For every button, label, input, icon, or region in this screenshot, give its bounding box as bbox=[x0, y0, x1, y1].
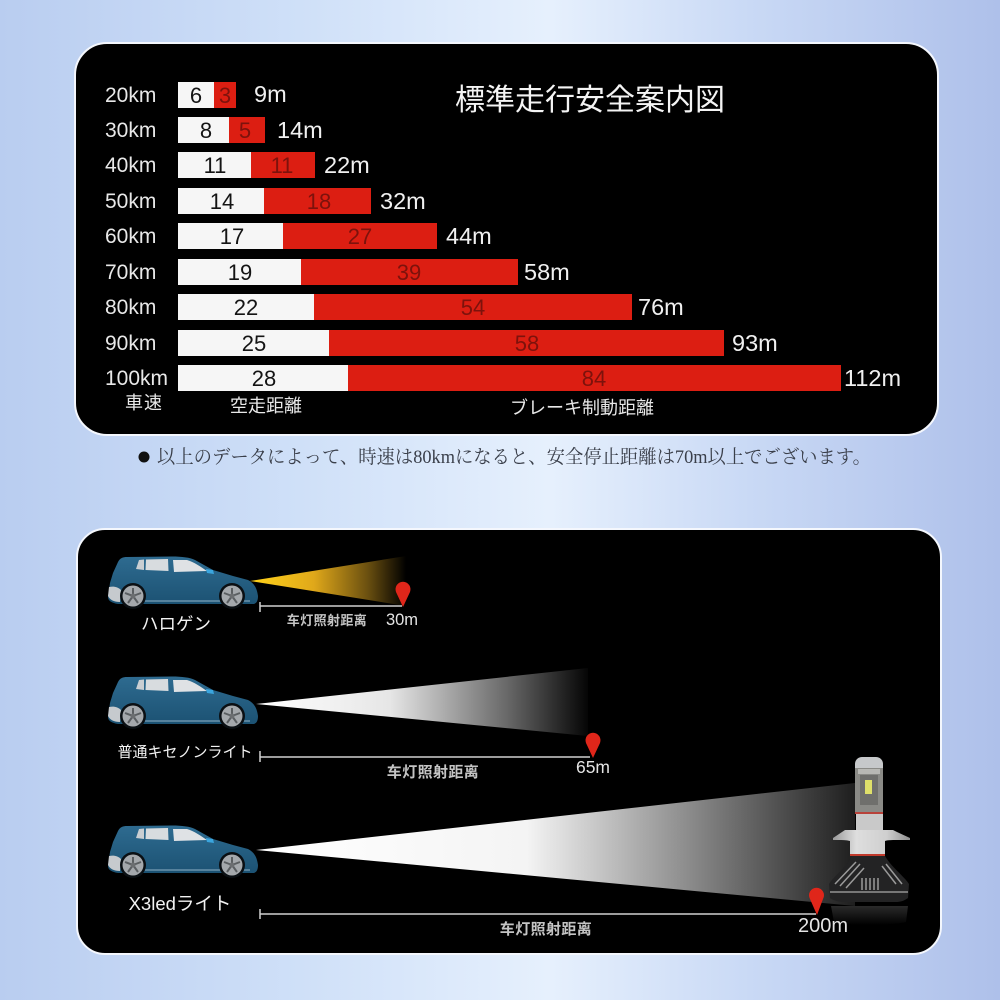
total distance values: 44m bbox=[446, 223, 492, 249]
reaction distance values: 11 bbox=[204, 153, 226, 178]
car: xenon bbox=[108, 676, 258, 729]
reaction distance values: 19 bbox=[228, 260, 252, 285]
speed labels: 90km bbox=[105, 332, 156, 355]
beam: xenon bbox=[256, 668, 588, 736]
speed labels: 40km bbox=[105, 154, 156, 177]
total distance values: 9m bbox=[254, 81, 287, 107]
braking distance values: 18 bbox=[307, 189, 331, 214]
halogen row bbox=[108, 556, 418, 634]
pin bbox=[809, 888, 824, 915]
led row bbox=[108, 757, 910, 938]
speed labels: 60km bbox=[105, 225, 156, 248]
total distance values: 58m bbox=[524, 259, 570, 285]
range caption: 车灯照射距离 bbox=[287, 613, 367, 628]
axis caption: braking distance: ブレーキ制動距離 bbox=[510, 397, 654, 418]
braking distance values: 11 bbox=[271, 153, 293, 178]
braking distance values: 5 bbox=[239, 118, 251, 143]
total distance values: 22m bbox=[324, 152, 370, 178]
speed labels: 80km bbox=[105, 296, 156, 319]
axis caption: reaction distance: 空走距離 bbox=[230, 396, 302, 416]
speed labels: 20km bbox=[105, 84, 156, 107]
braking distance values: 27 bbox=[348, 224, 372, 249]
xenon row bbox=[108, 668, 610, 781]
speed labels bbox=[105, 84, 168, 390]
range value: 200m bbox=[798, 915, 848, 937]
range caption: 车灯照射距离 bbox=[387, 763, 479, 781]
car: halogen bbox=[108, 556, 258, 609]
braking distance values: 54 bbox=[461, 295, 485, 320]
label: halogen: ハロゲン bbox=[141, 614, 211, 634]
braking distance values: 58 bbox=[515, 331, 539, 356]
total distance values: 32m bbox=[380, 188, 426, 214]
pin bbox=[396, 582, 410, 607]
reaction distance values: 22 bbox=[234, 295, 258, 320]
axis caption: vehicle speed: 車速 bbox=[125, 393, 163, 413]
range line bbox=[260, 751, 590, 762]
label: led: X3ledライト bbox=[129, 893, 231, 914]
total distance values: 76m bbox=[638, 294, 684, 320]
car: led bbox=[108, 826, 258, 878]
total distance values: 14m bbox=[277, 117, 323, 143]
icon: LED headlight bulb bbox=[829, 757, 910, 925]
beam: led bbox=[256, 783, 855, 906]
pin bbox=[586, 733, 600, 758]
reaction distance values: 14 bbox=[210, 189, 234, 214]
range value: 65m bbox=[576, 757, 610, 777]
range caption: 车灯照射距离 bbox=[500, 920, 592, 938]
reaction distance values: 6 bbox=[190, 83, 202, 108]
reaction distance values: 28 bbox=[252, 366, 276, 391]
label: xenon: 普通キセノンライト bbox=[117, 744, 253, 761]
total distance values: 112m bbox=[844, 365, 901, 391]
reaction distance values: 8 bbox=[200, 118, 212, 143]
chart title: 標準走行安全案内図 bbox=[455, 84, 725, 117]
reaction distance values: 25 bbox=[242, 331, 266, 356]
reaction distance values: 17 bbox=[220, 224, 244, 249]
range value: 30m bbox=[386, 611, 418, 629]
panel: headlight range comparison bbox=[77, 529, 941, 954]
speed labels: 30km bbox=[105, 119, 156, 142]
speed labels: 70km bbox=[105, 261, 156, 284]
braking distance values: 84 bbox=[582, 366, 606, 391]
braking distance values bbox=[219, 83, 606, 391]
braking distance values: 39 bbox=[397, 260, 421, 285]
range line bbox=[260, 602, 402, 612]
reaction distance values bbox=[190, 83, 276, 391]
total distance values: 93m bbox=[732, 330, 778, 356]
braking distance values: 3 bbox=[219, 83, 231, 108]
note text: 以上のデータによって、時速は80kmになると、安全停止距離は70m以上でございます。 bbox=[157, 446, 871, 468]
bar chart: reaction and braking distance bbox=[178, 82, 841, 391]
beam: halogen bbox=[250, 556, 406, 606]
range line bbox=[260, 909, 816, 919]
speed labels: 100km bbox=[105, 367, 168, 390]
panel: stopping distance chart bbox=[75, 43, 938, 435]
total distance values bbox=[254, 81, 901, 391]
speed labels: 50km bbox=[105, 190, 156, 213]
